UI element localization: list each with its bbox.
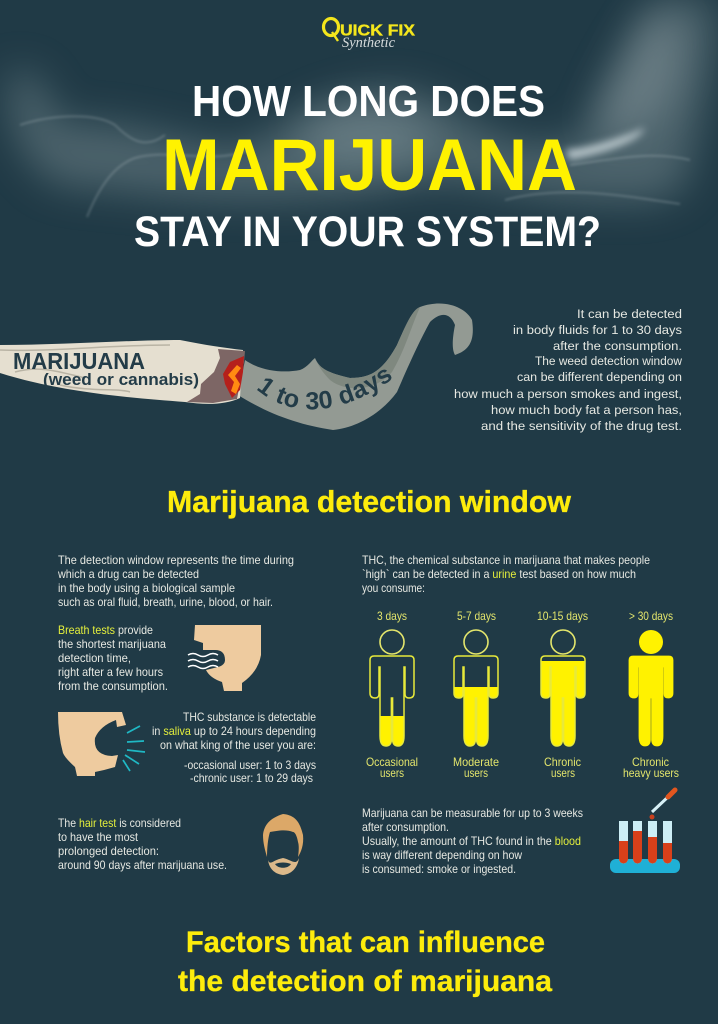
intro paragraph: in body fluids for 1 to 30 days — [513, 323, 682, 337]
figure: moderate users: users — [464, 766, 488, 780]
text: blood test: Marijuana can be measurable for up to 3 weeks — [362, 806, 583, 820]
text: saliva: -chronic user: 1 to 29 days — [190, 771, 313, 785]
text: breath tests: Breath tests provide — [58, 623, 153, 637]
text: hair test: to have the most — [58, 830, 139, 844]
figure: chronic heavy users: heavy users — [623, 766, 679, 780]
intro paragraph: can be different depending on — [517, 370, 682, 384]
text: saliva — [152, 710, 316, 785]
text: saliva: on what king of the user you are: — [160, 738, 316, 752]
heading: detection window: Marijuana detection window — [167, 484, 572, 519]
icon: test tubes — [610, 790, 680, 873]
text: blood test: is way different depending on how — [362, 848, 522, 862]
title: MARIJUANA — [162, 125, 577, 206]
smoke label: 1 to 30 days — [257, 370, 392, 410]
intro paragraph: after the consumption. — [553, 339, 682, 353]
intro paragraph: how much body fat a person has, — [491, 403, 682, 417]
logo: Quick Fix Synthetic: UICK FIX — [340, 22, 416, 40]
smoke background — [9, 0, 715, 217]
text: breath tests: detection time, — [58, 651, 131, 665]
figure: occasional users: Occasional — [366, 755, 418, 769]
joint paper — [0, 340, 243, 404]
burnt tip — [187, 349, 245, 403]
text: blood test: Usually, the amount of THC found in the blood — [362, 834, 581, 848]
joint illustration — [0, 304, 473, 430]
text: urine test intro: `high` can be detected in a urine test based on how much — [362, 567, 636, 581]
joint illustration: (weed or cannabis) — [43, 371, 199, 389]
intro paragraph: It can be detected — [577, 307, 682, 321]
figure: chronic heavy users: Chronic — [632, 755, 669, 769]
text: saliva: -occasional user: 1 to 3 days — [184, 758, 316, 772]
text: breath tests: the shortest marijuana — [58, 637, 166, 651]
text: urine test intro — [362, 553, 650, 595]
figure: occasional users: users — [380, 766, 404, 780]
heading: factors: the detection of marijuana — [178, 965, 552, 998]
title: HOW LONG DOES — [192, 77, 545, 126]
figure: moderate users — [453, 609, 499, 780]
joint label: MARIJUANA — [13, 348, 145, 374]
text: hair test: around 90 days after marijuana use. — [58, 858, 227, 872]
figure: occasional users — [366, 609, 418, 780]
figure: chronic heavy users — [623, 609, 679, 780]
text: detection window definition: which a drug can be detected — [57, 567, 199, 581]
text: saliva: THC substance is detectable — [183, 710, 316, 724]
text: breath tests: from the consumption. — [58, 679, 168, 693]
icon: hair and beard — [263, 814, 303, 875]
text: blood test: after consumption. — [362, 820, 449, 834]
text: urine test intro: you consume: — [362, 581, 425, 595]
text: hair test: The hair test is considered — [58, 816, 181, 830]
text: urine test intro: THC, the chemical substance in marijuana that makes people — [362, 553, 650, 567]
text: blood test: is consumed: smoke or ingested. — [362, 862, 516, 876]
title — [134, 77, 601, 256]
icon: breath face — [188, 625, 261, 691]
intro paragraph: and the sensitivity of the drug test. — [481, 419, 682, 433]
text: hair test — [58, 816, 227, 872]
intro paragraph: The weed detection window — [535, 354, 682, 368]
figure: chronic users: users — [551, 766, 575, 780]
text: detection window definition: in the body using a biological sample — [58, 581, 235, 595]
heading: factors: Factors that can influence — [186, 926, 545, 959]
logo: Quick Fix Synthetic: Synthetic — [342, 35, 395, 51]
text: saliva: in saliva up to 24 hours depending — [152, 724, 316, 738]
smoke ribbon — [238, 304, 473, 430]
text: detection window definition — [57, 553, 294, 609]
text: detection window definition: The detection window represents the time during — [58, 553, 294, 567]
title: STAY IN YOUR SYSTEM? — [134, 208, 601, 256]
text: blood test — [362, 806, 583, 876]
figure: moderate users: Moderate — [453, 755, 499, 769]
logo: Quick Fix Synthetic — [324, 18, 416, 51]
intro paragraph: how much a person smokes and ingest, — [454, 387, 682, 401]
text: detection window definition: such as oral fluid, breath, urine, blood, or hair. — [58, 595, 273, 609]
heading: factors — [178, 926, 552, 998]
figure: moderate users: 5-7 days — [457, 609, 496, 623]
text: hair test: prolonged detection: — [58, 844, 159, 858]
text: breath tests: right after a few hours — [58, 665, 163, 679]
figure: chronic users: 10-15 days — [537, 609, 588, 623]
figure: chronic users — [537, 609, 588, 780]
text: breath tests — [58, 623, 168, 693]
intro paragraph — [454, 307, 682, 433]
ember — [223, 356, 244, 398]
figure: chronic users: Chronic — [544, 755, 581, 769]
figure: chronic heavy users: > 30 days — [629, 609, 673, 623]
icon: saliva face — [58, 712, 145, 776]
figure: occasional users: 3 days — [377, 609, 407, 623]
